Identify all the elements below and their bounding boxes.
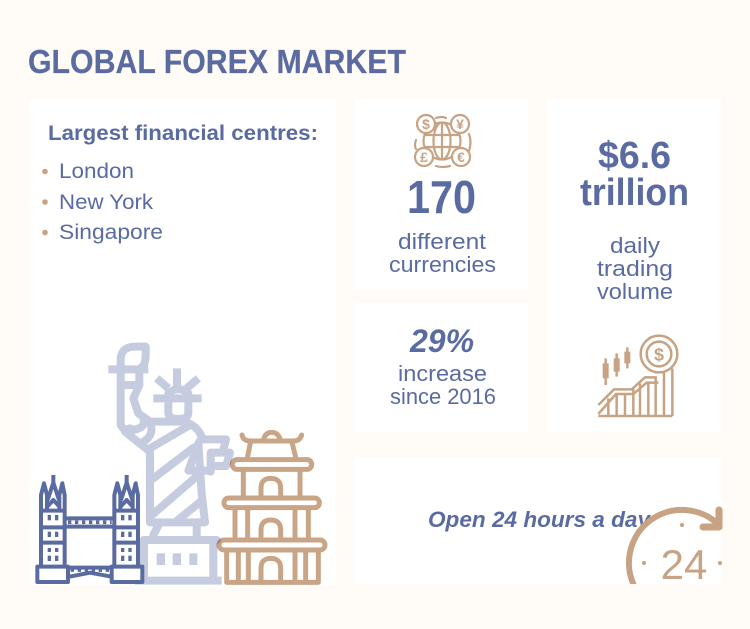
heading: largest financial centres: Largest financial centres: [48,122,318,145]
label: different currencies: different [398,229,486,254]
panel: 170 currencies [354,99,528,290]
icon: statue of liberty [108,347,230,581]
list of centres [42,160,163,244]
icon: pagoda [219,432,325,582]
label: daily trading volume [597,233,673,304]
list of centres: New York [59,191,154,214]
icon: growth chart with coin [598,336,677,416]
icon: globe with currencies: £ [420,149,428,165]
label: increase since 2016: since 2016 [390,384,496,409]
stat: $6.6 trillion [580,135,689,214]
icon: globe with currencies [415,115,470,167]
panel: open 24 hours [429,506,722,584]
text: open 24 hours a day: Open 24 hours a day [428,507,652,532]
list of centres: London [59,160,134,183]
icon: 24 hour clock [629,510,722,590]
icon: globe with currencies: € [457,149,465,165]
panel: largest financial centres [29,99,336,585]
icon: globe with currencies: $ [422,116,430,132]
label: different currencies: currencies [389,252,496,277]
label: increase since 2016 [390,361,496,409]
panel: 29% increase [354,303,528,432]
stat: 170: 170 [407,171,476,223]
icon: 24 hour clock: 24 [661,541,707,588]
label: increase since 2016: increase [398,361,487,386]
label: different currencies [389,229,496,277]
icon: landmarks [37,347,325,582]
label: daily trading volume: volume [597,279,673,304]
icon: tower bridge [37,475,142,582]
stat: $6.6 trillion: $6.6 [598,135,671,177]
icon: globe with currencies: ¥ [456,116,464,132]
label: daily trading volume: daily [610,233,660,258]
stat: 29%: 29% [409,323,474,359]
panel: daily trading volume [547,99,721,432]
label: daily trading volume: trading [597,256,673,281]
stat: $6.6 trillion: trillion [580,172,689,214]
icon: growth chart with coin: $ [654,345,664,365]
title: GLOBAL FOREX MARKET [28,43,406,80]
list of centres: Singapore [59,221,163,244]
